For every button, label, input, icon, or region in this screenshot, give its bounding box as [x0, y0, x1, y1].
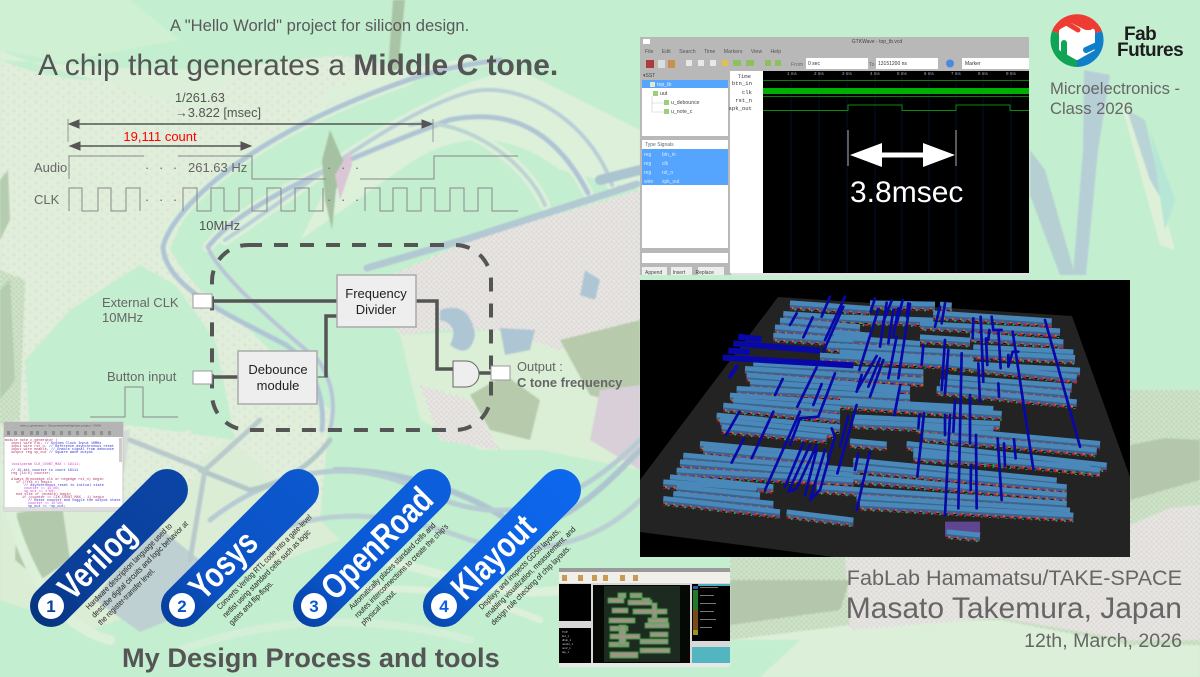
count arrow: [70, 142, 251, 150]
screenshot: Verilog code editor: counter <= 15'd0;: [24, 486, 60, 491]
timing diagram: [34, 90, 518, 233]
step number: [169, 593, 195, 619]
tool: Klayout: [414, 460, 590, 636]
metal layers: [663, 303, 1107, 542]
measurement arrow: [848, 130, 956, 167]
screenshot: Verilog code editor: always @(posedge clk or negedge rst_n) begin: [11, 477, 103, 482]
wires: [212, 301, 491, 377]
waveform viewport: 5 ms: [897, 71, 908, 76]
search box and buttons: Append Insert Replace: [645, 270, 714, 276]
step number: 3: [309, 597, 319, 616]
block: frequency divider: Frequency: [345, 286, 407, 301]
screenshot: KLayout: tap_1: [562, 650, 569, 654]
screenshot: Verilog code editor: counter <= 15'd0;: [28, 501, 64, 506]
layout view: [593, 585, 690, 663]
block diagram: [90, 245, 623, 430]
screenshot: Verilog code editor: module note_c_generator (: [5, 438, 58, 443]
signals list: spk_out: [662, 179, 680, 185]
clock waveform: · · ·: [327, 192, 362, 207]
signals list: Type Signals: [645, 142, 674, 148]
description: enabling visualization, measurement, and: [482, 525, 578, 620]
tool: Verilog: [21, 460, 197, 636]
signals list: [642, 140, 728, 248]
author: Masato Takemura, Japan: [846, 592, 1182, 625]
signals list: reg: [644, 170, 651, 176]
screenshot: Verilog code editor: end else if (enable) begin: [16, 492, 71, 497]
audio waveform: · · ·: [145, 160, 180, 175]
signals list: reg: [644, 161, 651, 167]
toolbar: From: [791, 62, 803, 68]
waveform viewport: [763, 71, 1029, 273]
screenshot: Verilog code editor: sp_out <= 1'b0;: [24, 489, 56, 494]
class label: Microelectronics -: [1050, 79, 1180, 98]
screenshot: Verilog code editor: // Asynchronous reset to initial state: [24, 483, 104, 488]
left panels: [559, 584, 591, 621]
screenshot: Verilog code editor: input wire clk, // System Clock Input 10MHz: [11, 441, 101, 446]
block: debounce module: [238, 351, 317, 404]
screenshot: Verilog code editor: // Reset counter and toggle the output state: [28, 498, 120, 503]
screenshot: KLayout: nand2_1: [562, 642, 573, 646]
screenshot: Verilog code editor: reg [14:0] counter;: [11, 471, 51, 476]
pill: Yosys: [181, 522, 266, 607]
waveform viewport: 4 ms: [870, 71, 881, 76]
block: frequency divider: Divider: [356, 302, 397, 317]
clock waveform: [34, 188, 518, 233]
waveform viewport: 9 ms: [1006, 71, 1017, 76]
signal hierarchy tree: top_tb: [657, 82, 672, 88]
description: netlist using standard cells such as logic: [220, 527, 313, 620]
step number: [301, 593, 327, 619]
waveform viewport: 1 ms: [787, 71, 798, 76]
screenshot: KLayout: dfxtp_1: [562, 638, 572, 642]
logo wordmark: Futures: [1117, 40, 1183, 61]
description: Displays and inspects GDSII layouts,: [477, 526, 562, 612]
screenshot: KLayout: buf_1: [562, 634, 569, 638]
waveform viewport: 6 ms: [924, 71, 935, 76]
logo mark: [1050, 14, 1104, 67]
tool: Yosys: [152, 460, 328, 636]
screenshot: KLayout: TOP: [562, 630, 568, 634]
waveform viewport: 3 ms: [842, 71, 853, 76]
block: debounce module: Debounce: [248, 362, 308, 377]
date: 12th, March, 2026: [1024, 630, 1182, 652]
period arrow: [68, 119, 433, 142]
scrollbars: [731, 273, 1029, 276]
description: describe digital circuits and logic behavior at: [89, 519, 190, 620]
lab name: FabLab Hamamatsu/TAKE-SPACE: [847, 565, 1182, 590]
bottom left shapes: [0, 440, 340, 630]
class label: Class 2026: [1050, 99, 1133, 118]
right column: [1130, 390, 1200, 530]
screenshot: Verilog code editor: if (!rst_n) begin: [16, 480, 52, 485]
signal hierarchy tree: [642, 73, 728, 136]
window title and menu: [643, 39, 902, 55]
signal names: spk_out: [728, 105, 752, 112]
description: routes interconnections to create the chip's: [352, 522, 450, 620]
audio waveform: [34, 156, 518, 179]
pill: [21, 460, 197, 636]
pill: OpenRoad: [313, 479, 441, 607]
signals list: btn_in: [662, 152, 676, 158]
signal hierarchy tree: u_note_c: [671, 109, 693, 115]
3D chip layout render: [640, 280, 1130, 557]
input port: button: [90, 369, 212, 417]
output port: C tone frequency: [517, 375, 623, 390]
centre-bottom curves: [0, 60, 640, 650]
dashed chip boundary: [212, 245, 491, 430]
clock waveform: 10MHz: [199, 218, 240, 233]
screenshot: Verilog code editor: input wire rst_n, // Reference asynchronous reset: [11, 444, 114, 449]
AND gate: [453, 361, 479, 387]
measurement label: 3.8msec: [850, 176, 963, 209]
signals list: clk: [662, 161, 669, 167]
screenshot: Verilog code editor: input wire enable, // Enable signal from debounce: [11, 447, 114, 452]
signal names: clk: [742, 89, 753, 96]
pill: Verilog: [50, 513, 144, 607]
input port: button: Button input: [107, 369, 177, 384]
subtitle: A "Hello World" project for silicon design.: [170, 16, 469, 35]
description: Converts Verilog RTL code into a gate-level: [215, 512, 314, 612]
screenshot: GTKWave simulation: [640, 37, 1029, 276]
layers panel: [692, 584, 730, 641]
credits: [846, 565, 1182, 652]
step number: [431, 593, 457, 619]
description: gates and flip-flops.: [227, 579, 275, 627]
window title and menu: File Edit Search Time Markers View Help: [645, 49, 781, 55]
waveform viewport: 2 ms: [814, 71, 825, 76]
signal hierarchy tree: u_debounce: [671, 100, 700, 106]
signal names: btn_in: [732, 80, 752, 87]
toolbar: [646, 58, 1029, 69]
signal names: Time: [738, 73, 751, 80]
count label: 19,111 count: [123, 129, 197, 144]
screenshot: Verilog code editor: // 15-bit counter to count 19111: [11, 468, 78, 473]
screenshot: KLayout: nor2_1: [562, 646, 571, 650]
toolbar: 13151200 ns: [878, 61, 907, 67]
toolbar: 0 sec: [808, 61, 820, 67]
signal names: rst_n: [735, 97, 752, 104]
audio waveform: Audio: [34, 160, 67, 175]
bottom-right halftones: [730, 557, 1200, 677]
pill: Klayout: [443, 506, 544, 607]
toolbar: Marker: [965, 61, 981, 67]
vertical interconnect: [723, 297, 1080, 515]
input port: external CLK: 10MHz: [102, 310, 143, 325]
step number: [38, 593, 64, 619]
screenshot: KLayout: [559, 568, 730, 667]
screenshot: Verilog code editor: note_c_generator.v - Documents/verilog/note_project - GVIM: [20, 424, 101, 428]
block: debounce module: module: [257, 378, 299, 393]
pill: [284, 460, 460, 636]
waveform viewport: 7 ms: [951, 71, 962, 76]
description: design rule checking of chip layouts.: [489, 543, 573, 627]
signal names: [728, 71, 763, 273]
die plate: [640, 297, 1130, 557]
pill: [414, 460, 590, 636]
logo: Fab Futures: [1050, 14, 1183, 67]
signals list: wire: [644, 179, 653, 185]
input port: external CLK: [102, 294, 212, 325]
section heading: My Design Process and tools: [122, 642, 500, 673]
clock waveform: · · ·: [145, 192, 180, 207]
main title: A chip that generates a Middle C tone.: [38, 49, 558, 82]
period calculation label: →3.822 [msec]: [175, 105, 261, 120]
logo wordmark: Fab: [1124, 24, 1156, 45]
signals list: rst_n: [662, 170, 673, 176]
description: the register-transfer level.: [96, 566, 157, 627]
search box and buttons: [642, 253, 728, 276]
input port: external CLK: External CLK: [102, 295, 179, 310]
screenshot: Verilog code editor: [4, 422, 123, 511]
signals list: reg: [644, 152, 651, 158]
block: frequency divider: [337, 275, 416, 327]
pale band across top right of the wires: [300, 70, 640, 240]
top-right bands: [1030, 150, 1075, 275]
screenshot: Verilog code editor: if (counter == CLK_COUNT_MAX - 1) begin: [22, 495, 104, 500]
output port: Output :: [517, 359, 563, 374]
step number: 4: [439, 597, 449, 616]
audio waveform: 261.63 Hz: [188, 160, 247, 175]
screenshot: Verilog code editor: sp_out <= ~sp_out;: [28, 504, 66, 509]
description: Automatically places standard cells and: [347, 521, 438, 612]
screenshot: Verilog code editor: output reg sp_out // Square wave output: [11, 450, 93, 455]
step number: 1: [46, 597, 56, 616]
clock waveform: CLK: [34, 192, 60, 207]
audio waveform: · · ·: [327, 160, 362, 175]
signal hierarchy tree: ▾SST: [643, 73, 655, 79]
tool: OpenRoad: [284, 460, 460, 636]
waveform viewport: 8 ms: [978, 71, 989, 76]
description: Hardware description language used to: [84, 521, 174, 612]
period calculation label: 1/261.63: [175, 90, 225, 105]
signal hierarchy tree: uut: [660, 91, 668, 97]
window title and menu: GTKWave - top_tb.vcd: [852, 39, 902, 45]
description: physical layout.: [359, 588, 398, 627]
screenshot: Verilog code editor: localparam CLK_COUNT_MAX = 19111;: [11, 462, 80, 467]
pill: [152, 460, 328, 636]
output port: [491, 359, 623, 390]
toolbar: To: [869, 62, 875, 68]
step number: 2: [177, 597, 187, 616]
